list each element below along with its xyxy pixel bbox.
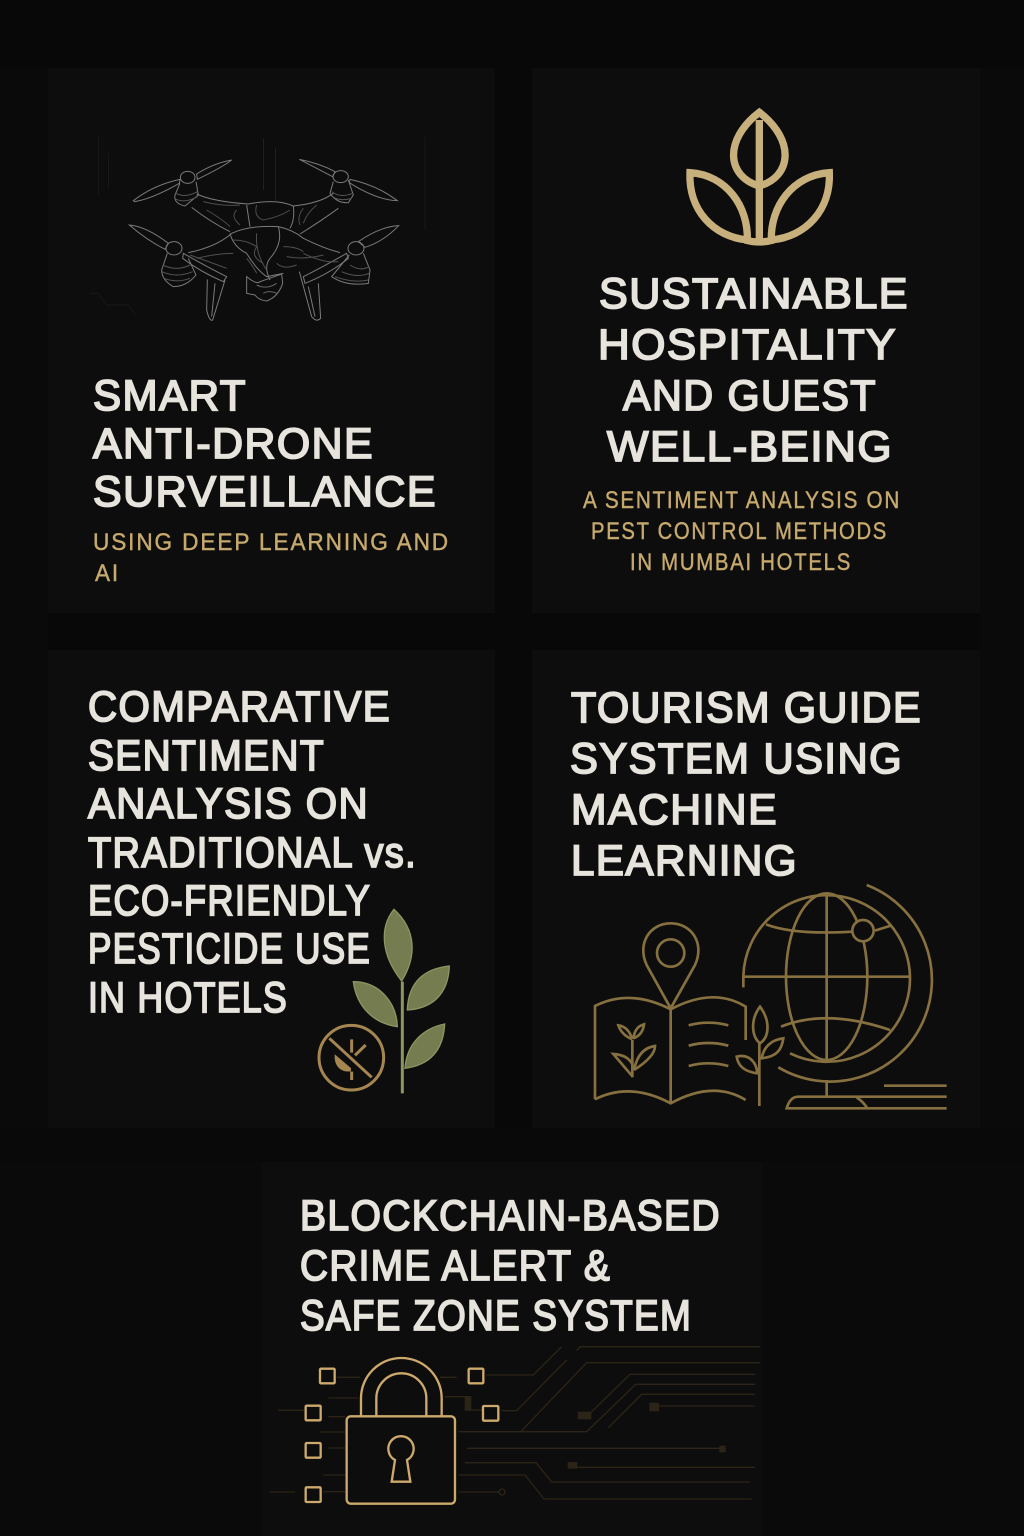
- icon: open book with map pin: [595, 923, 746, 1103]
- heading: sustainable hospitality and guest well-being: SUSTAINABLE: [599, 270, 909, 318]
- heading: comparative sentiment analysis: SENTIMENT: [88, 732, 325, 780]
- icon: small sprout: [737, 1007, 783, 1106]
- heading: tourism guide system: [570, 684, 922, 885]
- subheading: using deep learning and AI: AI: [95, 560, 120, 587]
- panel: smart anti-drone surveillance: [48, 68, 495, 613]
- heading: comparative sentiment analysis: ANALYSIS ON: [88, 780, 369, 828]
- heading: comparative sentiment analysis: [88, 683, 417, 1022]
- heading: comparative sentiment analysis: IN HOTELS: [88, 974, 288, 1022]
- heading: sustainable hospitality and guest well-being: WELL-BEING: [607, 423, 893, 471]
- icon: padlock: [306, 1358, 498, 1504]
- icon: olive green plant: [353, 909, 449, 1093]
- heading: blockchain crime alert and safe zone: BLOCKCHAIN-BASED: [300, 1192, 721, 1240]
- icon: no pesticide symbol: [319, 1025, 384, 1090]
- subheading: sentiment analysis on pest control: IN MUMBAI HOTELS: [630, 549, 852, 576]
- subheading: sentiment analysis on pest control: A SENTIMENT ANALYSIS ON: [583, 487, 901, 514]
- heading: blockchain crime alert and safe zone: SAFE ZONE SYSTEM: [300, 1292, 692, 1340]
- subheading: sentiment analysis on pest control: [583, 487, 901, 576]
- subheading: using deep learning and AI: USING DEEP LEARNING AND: [93, 529, 450, 556]
- subheading: sentiment analysis on pest control: PEST CONTROL METHODS: [591, 518, 888, 545]
- heading: tourism guide system: LEARNING: [571, 837, 798, 885]
- heading: comparative sentiment analysis: ECO-FRIENDLY: [88, 877, 371, 925]
- heading: smart anti-drone surveillance: SMART: [93, 372, 247, 420]
- graphic: circuit traces: [270, 1347, 760, 1499]
- heading: comparative sentiment analysis: COMPARATIVE: [88, 683, 391, 731]
- icon: globe on stand: [743, 885, 947, 1108]
- icon: sprout with three leaves: [690, 112, 829, 242]
- heading: comparative sentiment analysis: PESTICIDE USE: [88, 925, 371, 973]
- heading: sustainable hospitality and guest well-being: [598, 270, 909, 471]
- heading: blockchain crime alert and safe zone: CRIME ALERT &: [300, 1242, 611, 1290]
- heading: tourism guide system: SYSTEM USING: [570, 735, 903, 783]
- heading: smart anti-drone surveillance: SURVEILLANCE: [93, 468, 437, 516]
- icon: drone outline: [90, 137, 425, 320]
- panel: comparative sentiment analysis: [48, 650, 495, 1128]
- subheading: using deep learning and AI: [93, 529, 450, 587]
- heading: tourism guide system: TOURISM GUIDE: [571, 684, 922, 732]
- panel: blockchain crime alert: [262, 1162, 762, 1536]
- heading: comparative sentiment analysis: TRADITIONAL vs.: [88, 829, 417, 877]
- heading: blockchain crime alert and safe zone: [300, 1192, 721, 1340]
- heading: tourism guide system: MACHINE: [571, 786, 778, 834]
- panel: tourism guide system: [532, 650, 980, 1128]
- panel: sustainable hospitality: [532, 68, 980, 613]
- heading: smart anti-drone surveillance: ANTI-DRONE: [93, 420, 374, 468]
- heading: smart anti-drone surveillance: [93, 372, 437, 516]
- heading: sustainable hospitality and guest well-being: HOSPITALITY: [598, 321, 897, 369]
- heading: sustainable hospitality and guest well-being: AND GUEST: [623, 372, 877, 420]
